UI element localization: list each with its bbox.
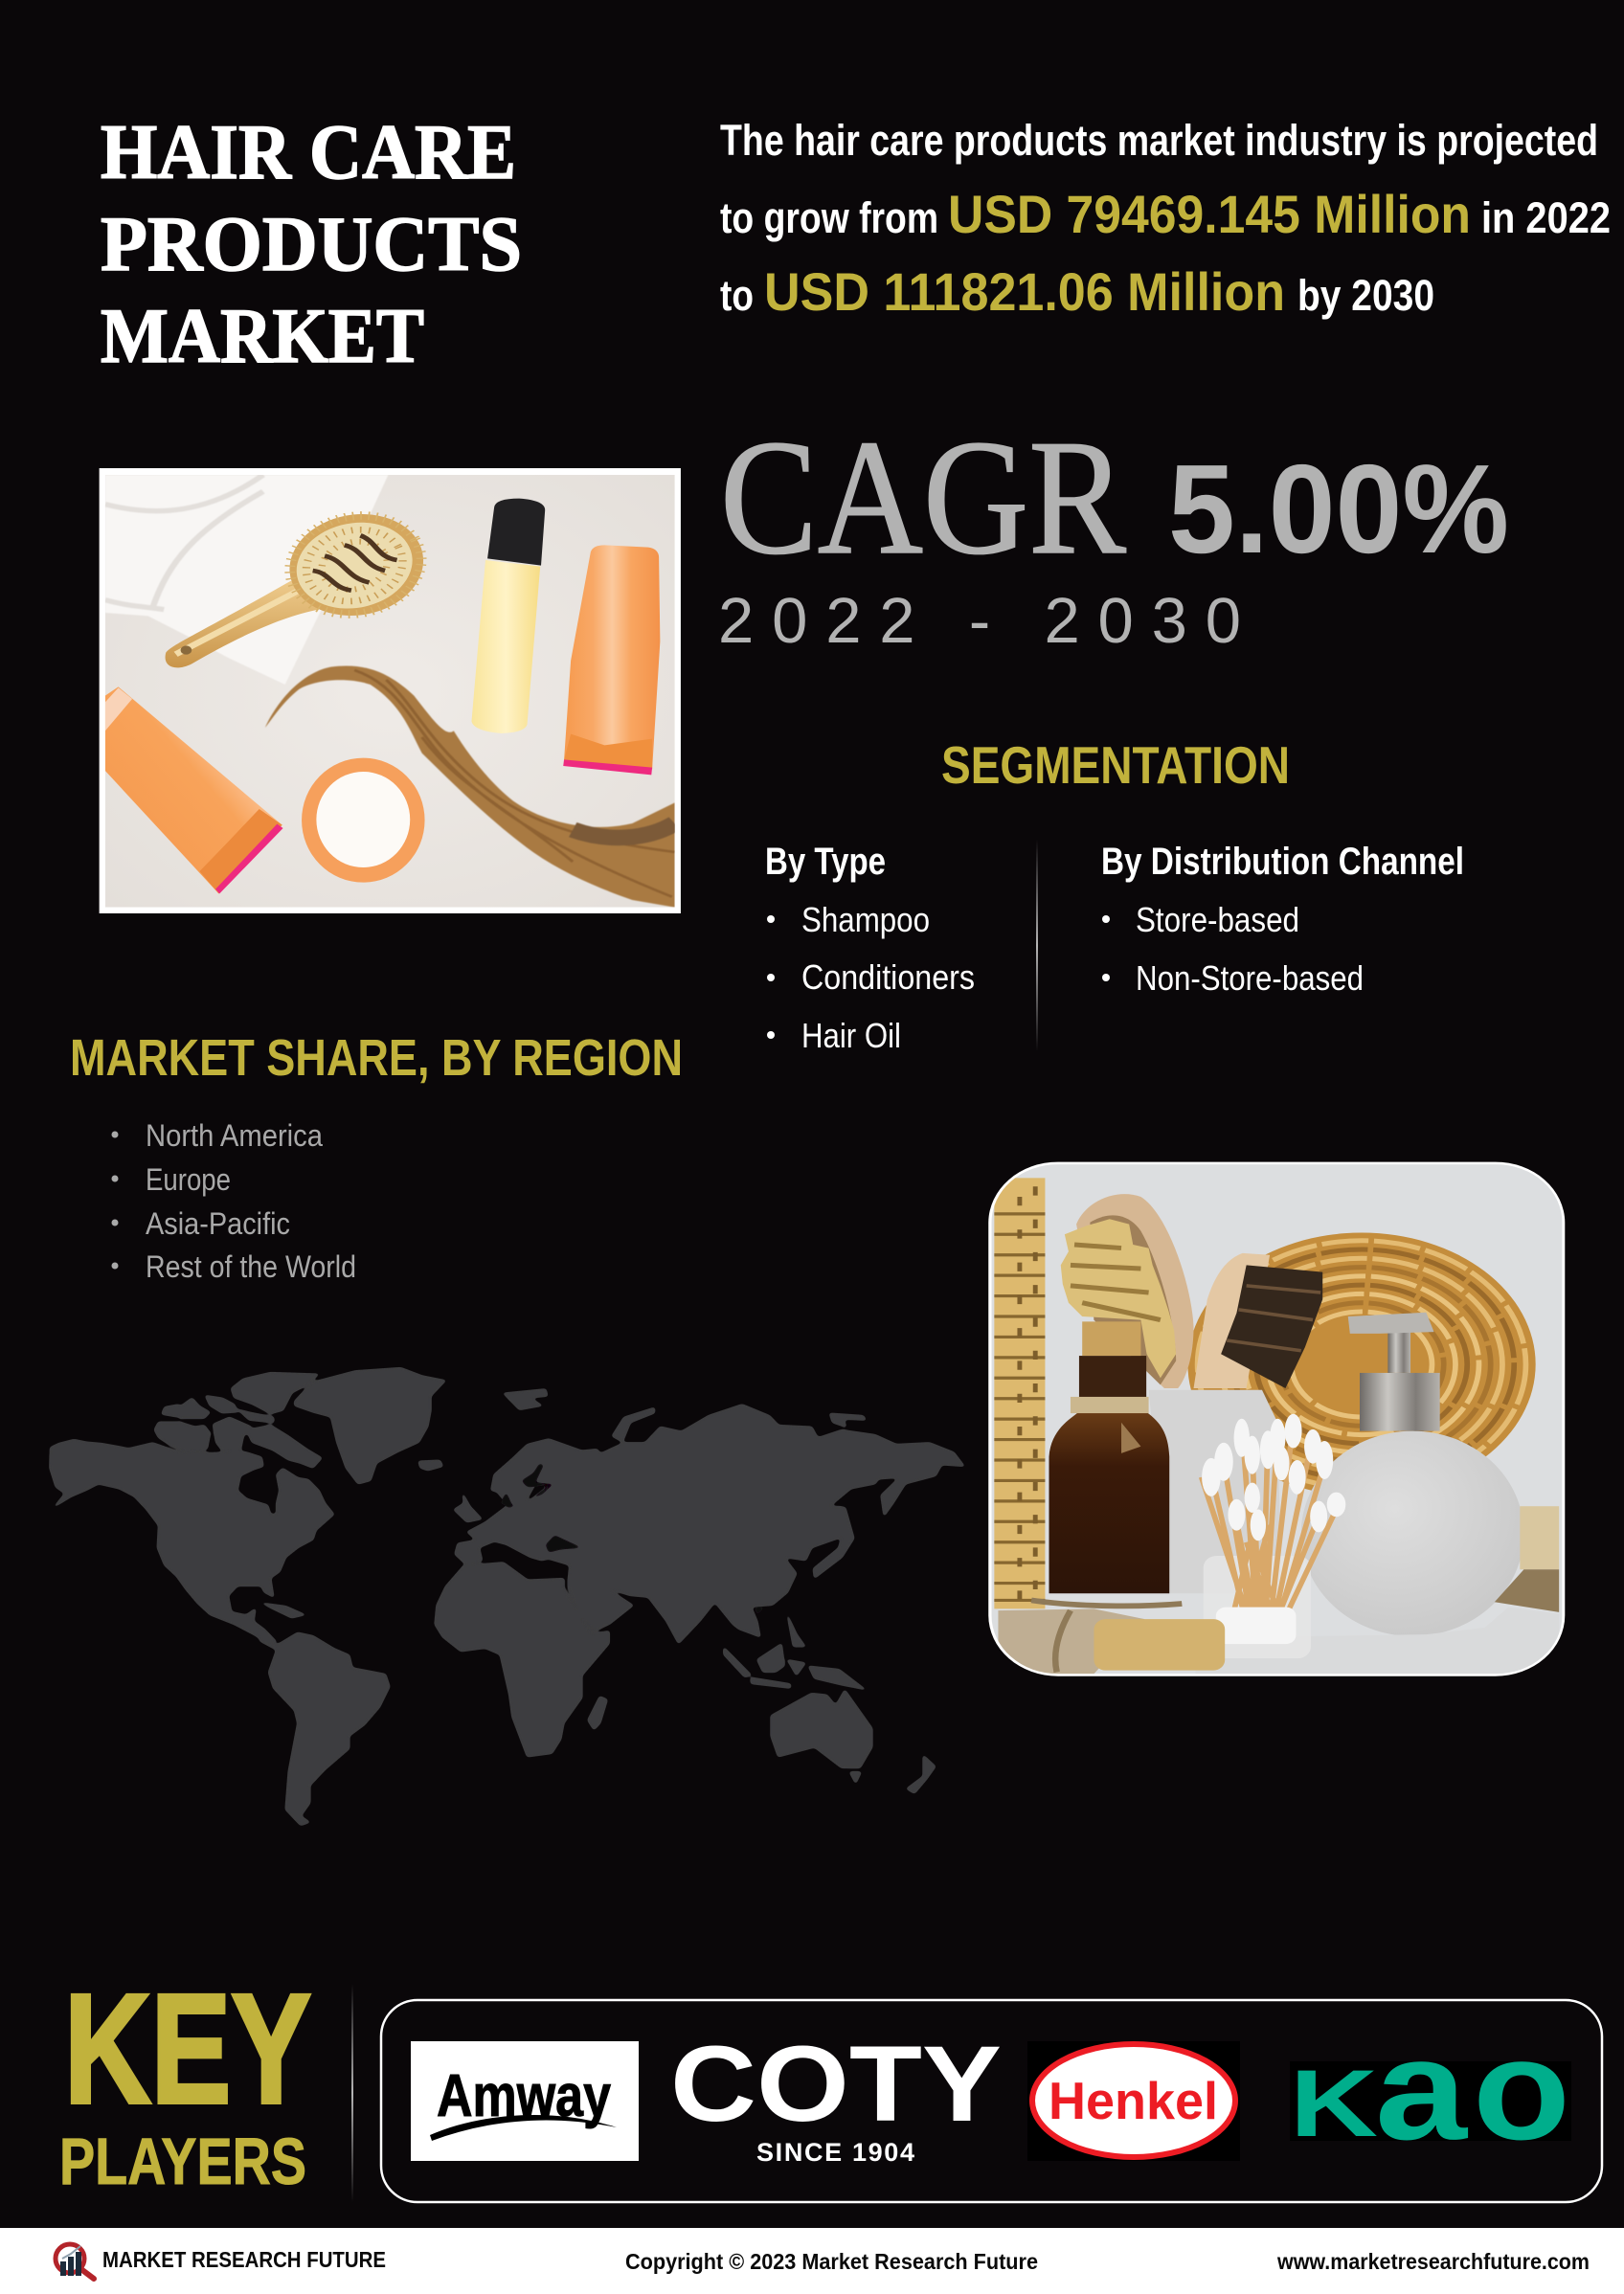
right orange bottle (563, 545, 660, 775)
wooden brush with light bristles (1061, 1194, 1194, 1388)
concrete cup (1149, 1390, 1281, 1593)
footer website: www.marketresearchfuture.com (1276, 2249, 1590, 2274)
wrapped soap (998, 1600, 1225, 1674)
segment column: by distribution channel: By Distribution Channel (1101, 841, 1464, 883)
region list (111, 1118, 356, 1284)
region list: Europe (146, 1162, 231, 1197)
segment column: by type: By Type (765, 841, 886, 883)
key players logo panel (381, 2000, 1602, 2202)
woven round mat (1187, 1232, 1536, 1496)
photo: natural bathroom products (988, 1162, 1565, 1676)
world map (50, 1367, 964, 1826)
market growth summary text: in 2022 (1481, 193, 1611, 242)
cotton swabs in jar (1202, 1414, 1345, 1658)
logo: Amway: Amway (437, 2063, 611, 2129)
segment column: by distribution channel: Store-based (1136, 900, 1299, 939)
heading: segmentation: SEGMENTATION (941, 735, 1290, 795)
title: HAIR CARE (101, 108, 516, 195)
soap dispenser (1301, 1313, 1523, 1636)
CAGR figure: CAGR (720, 407, 1126, 589)
title (101, 108, 522, 379)
wooden brush with dark bristles (1194, 1253, 1322, 1388)
CAGR figure: 5.00% (1168, 439, 1509, 579)
logo: Henkel: Henkel (1049, 2071, 1218, 2130)
side brush (1495, 1506, 1559, 1612)
segment column: by distribution channel (1101, 841, 1464, 998)
towel (105, 475, 388, 685)
forecast period: 2022 - 2030 (718, 585, 1241, 657)
market growth summary text (720, 116, 1611, 322)
logo: Kao: o (1473, 2009, 1570, 2170)
heading: key players: PLAYERS (59, 2125, 306, 2198)
table surface (1397, 1633, 1559, 1674)
logo: Kao: a (1375, 2009, 1469, 2170)
logo: Kao (1290, 2009, 1571, 2170)
footer logo icon (56, 2244, 94, 2279)
tube with black cap (471, 499, 545, 733)
region list: North America (146, 1118, 323, 1153)
market growth summary text: USD 111821.06 Million (764, 261, 1285, 322)
logo: Coty: SINCE 1904 (756, 2138, 914, 2167)
footer bar (0, 2228, 1624, 2294)
CAGR figure (720, 407, 1509, 589)
logo: Kao: K (1290, 2050, 1378, 2156)
title: MARKET (101, 292, 424, 379)
logo: Henkel (1027, 2041, 1240, 2161)
heading: market share by region: MARKET SHARE, BY REGION (70, 1029, 683, 1087)
region list: Rest of the World (146, 1249, 356, 1284)
footer brand name: MARKET RESEARCH FUTURE (102, 2247, 386, 2272)
amber bottle (1049, 1321, 1169, 1593)
hair strand (265, 666, 675, 908)
segment column: by distribution channel: Non-Store-based (1136, 958, 1364, 998)
title: PRODUCTS (101, 200, 522, 287)
left orange bottle (105, 686, 283, 893)
heading: key players: KEY (64, 1961, 311, 2136)
cream jar (302, 758, 425, 883)
segment column: by type: Conditioners (801, 957, 975, 997)
wicker basket (994, 1178, 1045, 1608)
logo: Amway (411, 2041, 639, 2161)
photo: hair care products flat lay (100, 468, 681, 913)
segment column: by type: Shampoo (801, 900, 930, 939)
segment column: by type: Hair Oil (801, 1016, 901, 1055)
region list: Asia-Pacific (146, 1206, 290, 1241)
footer copyright: Copyright © 2023 Market Research Future (625, 2249, 1038, 2274)
hair brush (166, 495, 445, 667)
market growth summary text: USD 79469.145 Million (948, 184, 1471, 244)
logo: Coty: COTY (670, 2024, 1002, 2144)
market growth summary text: to grow from (720, 193, 938, 242)
market growth summary text: to (720, 271, 754, 320)
segment column: by type (765, 841, 975, 1055)
heading: key players (59, 1961, 311, 2198)
market growth summary text: by 2030 (1297, 271, 1434, 320)
